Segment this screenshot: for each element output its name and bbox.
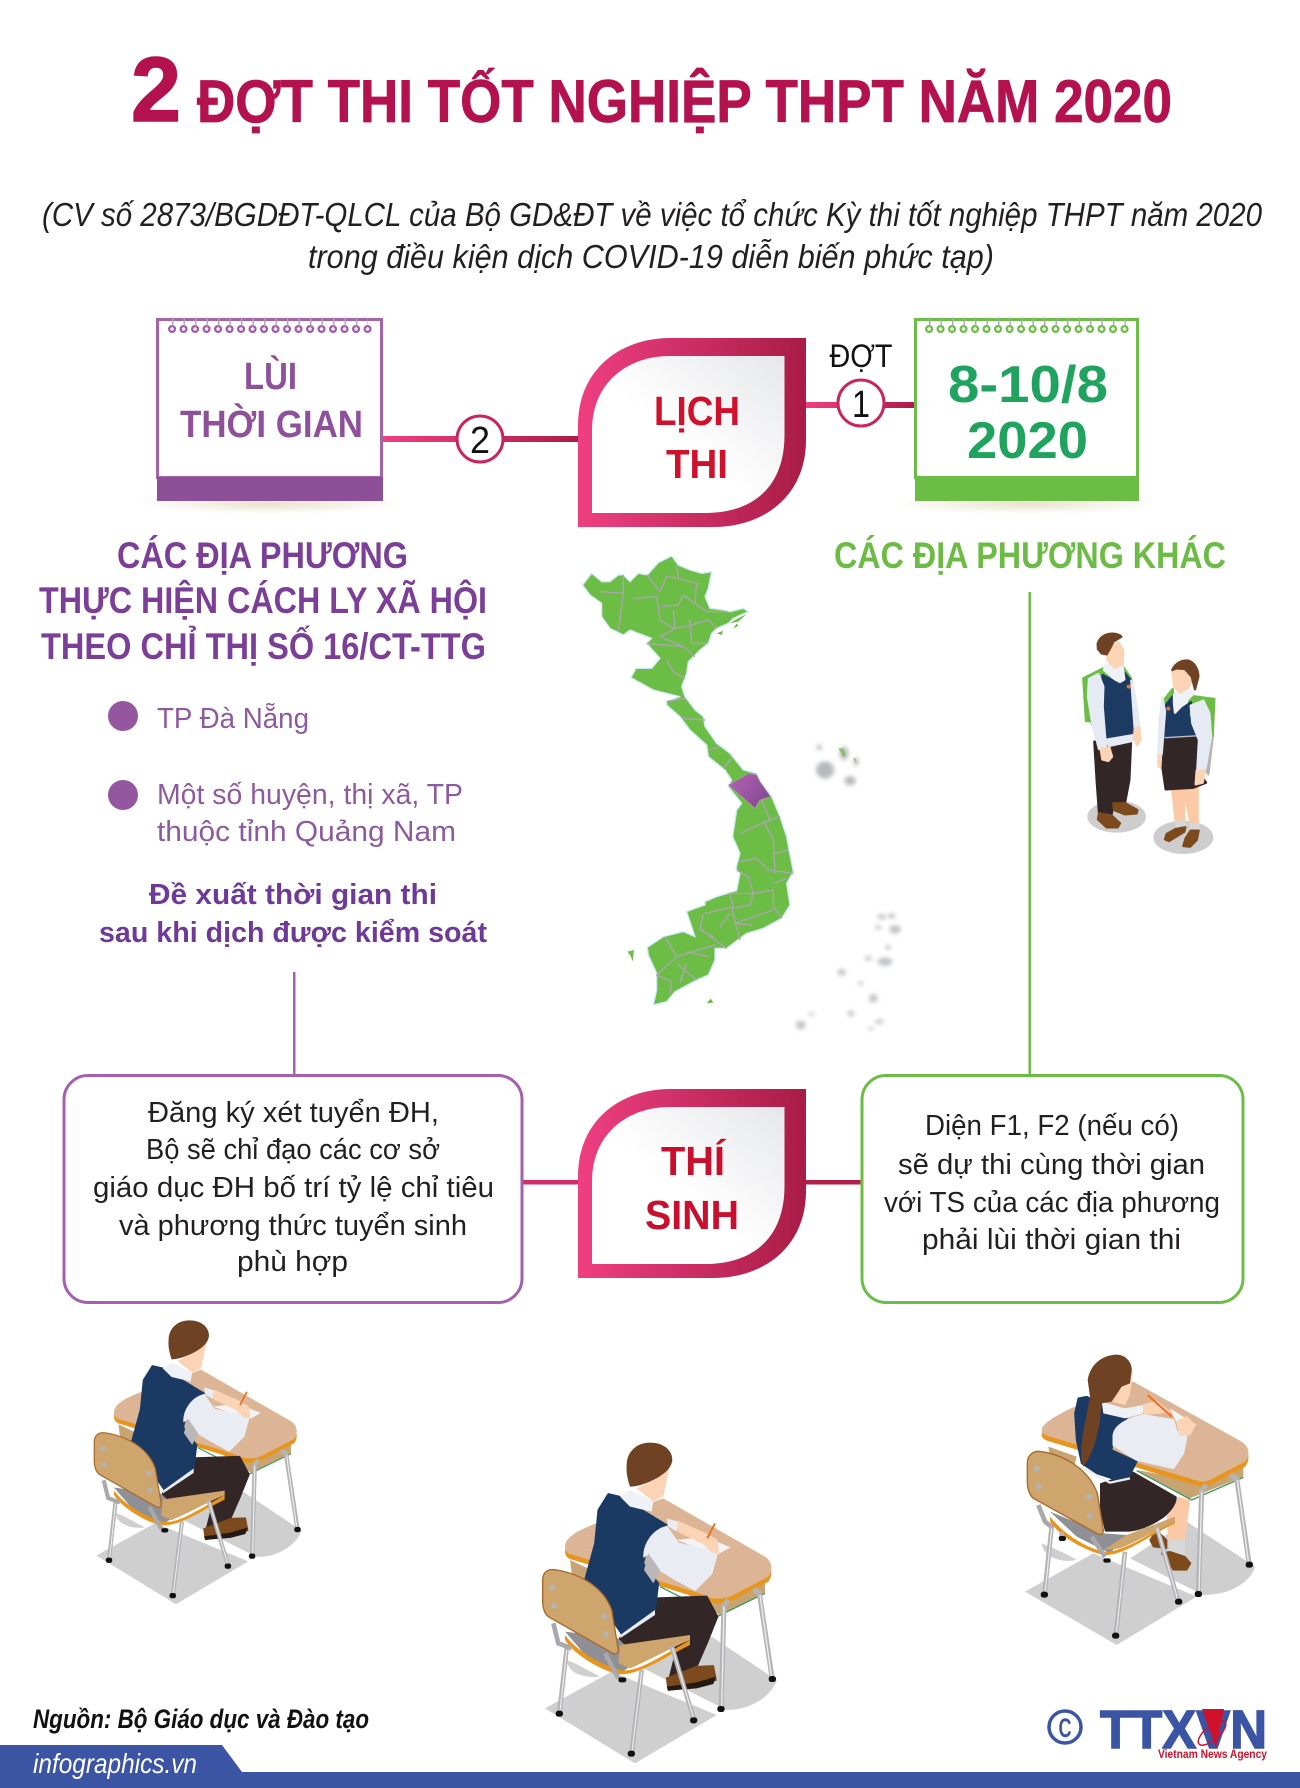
map of Vietnam <box>583 556 901 1030</box>
subtitle <box>42 196 1263 275</box>
small islands: Phú Quốc and Côn Đảo <box>627 950 713 1003</box>
number circle 1 with label ĐỢT: ĐỢT <box>830 338 892 374</box>
coastal islets <box>717 614 747 635</box>
footer band: infographics.vn <box>33 1748 197 1779</box>
calendar: 8-10/8 2020: 8-10/8 <box>948 356 1108 414</box>
islands: Trường Sa <box>796 913 901 1030</box>
bullet list: TP Đà Nẵng <box>157 702 309 735</box>
panel: right info box: sẽ dự thi cùng thời gian <box>898 1149 1205 1181</box>
subtitle: trong điều kiện dịch COVID-19 diễn biến phức tạp) <box>308 238 994 275</box>
number circle 1 with label ĐỢT <box>830 338 892 426</box>
panel: left info box: Đăng ký xét tuyển ĐH, <box>148 1097 439 1129</box>
line: purple connector <box>293 972 296 1075</box>
badge: lịch thi: THI <box>666 441 728 487</box>
panel: left info box: và phương thức tuyển sinh <box>119 1210 467 1242</box>
heading: các địa phương khác: CÁC ĐỊA PHƯƠNG KHÁC <box>834 535 1226 576</box>
badge: thí sinh: SINH <box>645 1192 739 1238</box>
badge: lịch thi: LỊCH <box>654 388 740 434</box>
bullet list: Một số huyện, thị xã, TP <box>157 779 463 811</box>
illustration: standing students <box>1083 634 1214 854</box>
bullet list <box>108 701 463 848</box>
islands: Hoàng Sa <box>816 745 858 785</box>
number circle 2: 2 <box>470 420 490 462</box>
highlighted province: Đà Nẵng and Quảng Nam <box>728 773 771 808</box>
line: green connector <box>1028 592 1031 1075</box>
number circle 2 <box>457 416 503 462</box>
title: 2 <box>131 39 181 141</box>
calendar: 8-10/8 2020: 2020 <box>967 412 1088 470</box>
illustration: male student at desk, centre <box>543 1443 777 1763</box>
panel: left info box: Bộ sẽ chỉ đạo các cơ sở <box>146 1134 440 1166</box>
bullet list: thuộc tỉnh Quảng Nam <box>157 816 456 848</box>
panel: right info box: với TS của các địa phương <box>884 1187 1220 1219</box>
proposal note: Đề xuất thời gian thi <box>149 879 437 911</box>
proposal note: sau khi dịch được kiểm soát <box>99 917 487 949</box>
logo: TTXVN: TTXVN <box>1100 1700 1267 1760</box>
badge: thí sinh <box>578 1089 806 1278</box>
calendar: 8-10/8 2020 <box>892 320 1162 514</box>
logo: TTXVN: Vietnam News Agency <box>1158 1747 1267 1761</box>
panel: left info box: phù hợp <box>237 1246 348 1278</box>
calendar: lùi thời gian <box>135 320 405 514</box>
connector: lịch thi to đợt 1 <box>806 402 915 408</box>
connector: thí sinh to right box <box>806 1180 861 1184</box>
panel: right info box: Diện F1, F2 (nếu có) <box>925 1110 1179 1142</box>
number circle 1 with label ĐỢT: 1 <box>852 384 870 426</box>
title <box>131 39 1172 141</box>
logo: TTXVN: C <box>1058 1713 1072 1743</box>
panel: right info box: phải lùi thời gian thi <box>922 1224 1181 1256</box>
mainland provinces <box>583 556 793 1005</box>
panel: right info box <box>862 1076 1243 1302</box>
badge: thí sinh: THÍ <box>661 1138 727 1184</box>
panel: left info box: giáo dục ĐH bố trí tỷ lệ chỉ tiêu <box>93 1172 494 1204</box>
calendar: lùi thời gian: LÙI <box>244 354 297 398</box>
illustration: male student at desk, left <box>94 1320 301 1604</box>
illustration: female student at desk, right <box>1025 1355 1255 1645</box>
heading: các địa phương thực hiện cách ly: CÁC ĐỊA PHƯƠNG <box>117 535 408 576</box>
heading: các địa phương thực hiện cách ly: THỰC HIỆN CÁCH LY XÃ HỘI <box>39 579 487 621</box>
heading: các địa phương thực hiện cách ly <box>39 535 487 667</box>
connector: lịch thi to đợt 2 <box>383 436 578 442</box>
title: ĐỢT THI TỐT NGHIỆP THPT NĂM 2020 <box>197 68 1172 135</box>
proposal note <box>99 879 487 949</box>
footer band <box>0 1745 1300 1788</box>
source note: Nguồn: Bộ Giáo dục và Đào tạo <box>33 1704 369 1734</box>
badge: lịch thi <box>578 338 806 527</box>
panel: left info box <box>64 1076 522 1302</box>
connector: left box to thí sinh <box>523 1180 578 1184</box>
calendar: lùi thời gian: THỜI GIAN <box>180 402 363 446</box>
heading: các địa phương thực hiện cách ly: THEO CHỈ THỊ SỐ 16/CT-TTG <box>41 625 486 667</box>
